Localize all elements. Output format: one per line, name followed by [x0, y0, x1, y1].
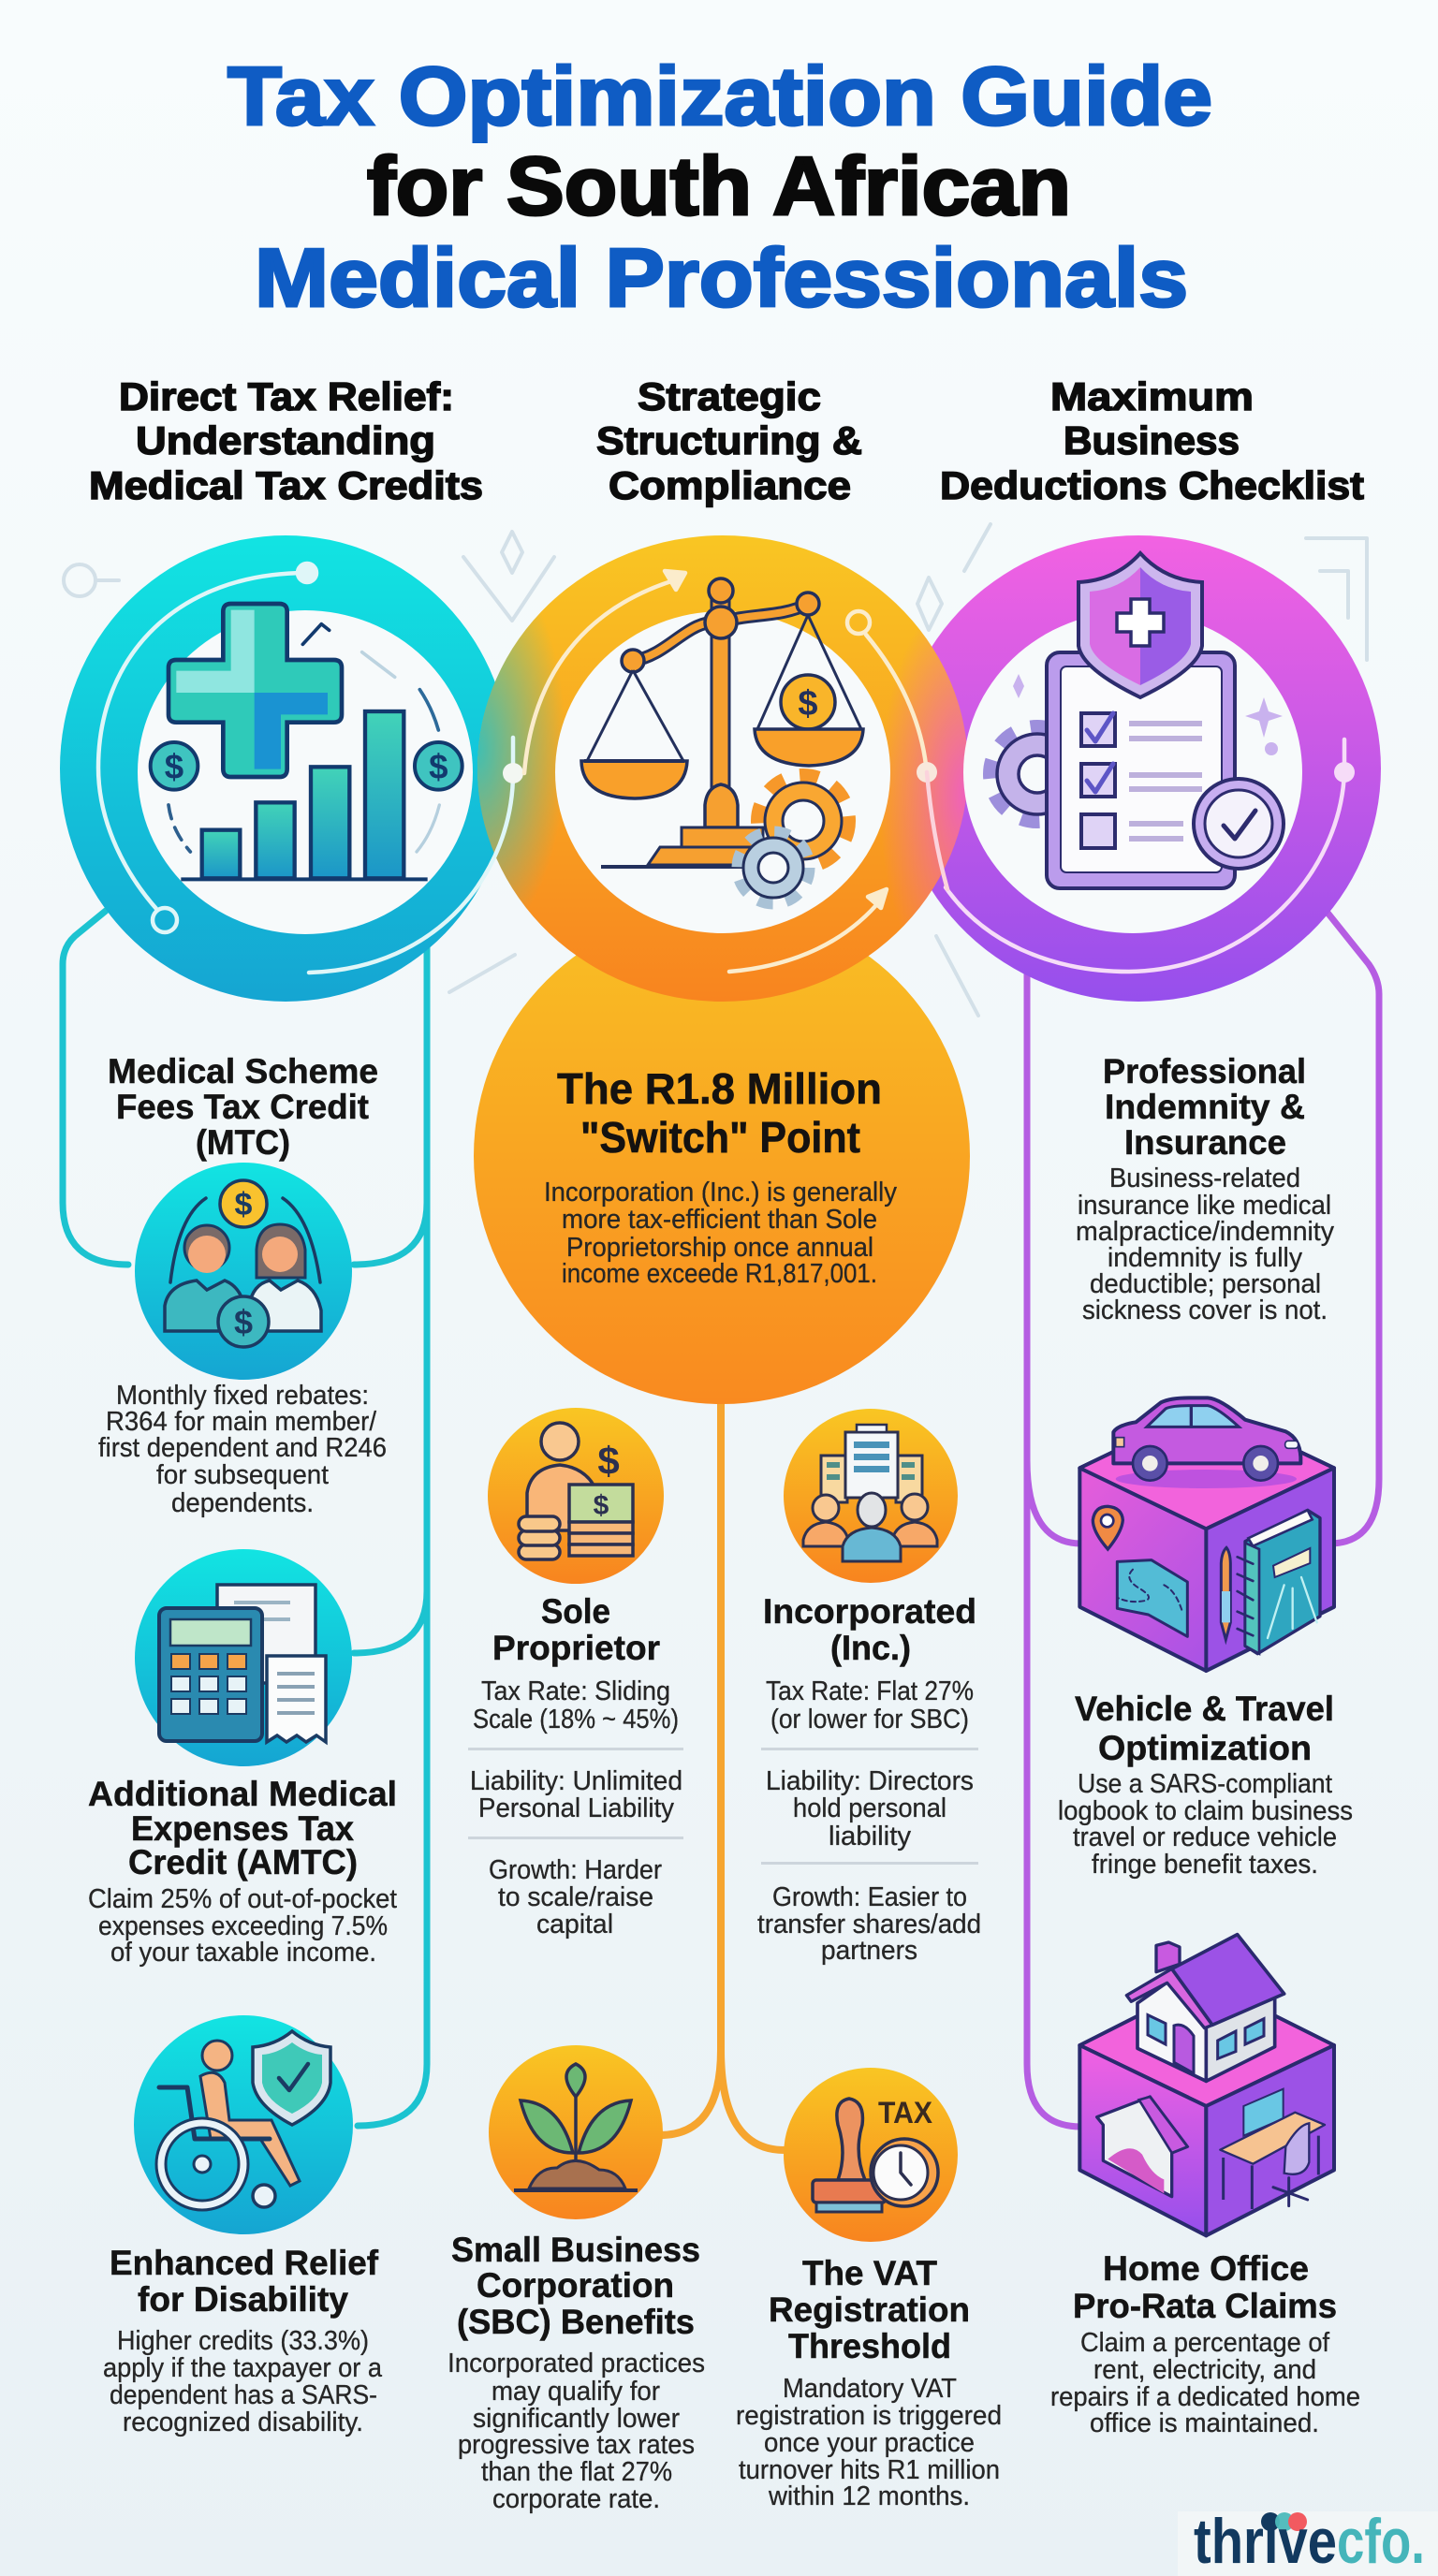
text block: professional indemnity and insurance: Professional — [1103, 1052, 1306, 1090]
text block: small business corporation: significantly lower — [473, 2404, 680, 2434]
text block: medical scheme fees tax credit — [98, 1052, 387, 1518]
text block: medical scheme fees tax credit: for subsequent — [156, 1460, 329, 1490]
text block: additional medical expenses tax credit: of your taxable income. — [110, 1938, 376, 1968]
icon: medical cross and bar chart: $ — [429, 748, 448, 786]
text block: small business corporation — [448, 2231, 705, 2514]
text block: vehicle and travel optimization: logbook to claim business — [1058, 1796, 1353, 1826]
text block: incorporated comparison: (or lower for SBC) — [770, 1705, 969, 1734]
heading: direct tax relief — [89, 374, 483, 507]
text block: enhanced relief for disability: recognized disability. — [123, 2408, 363, 2437]
text block: enhanced relief for disability: dependent has a SARS- — [110, 2380, 377, 2410]
logo: thrivecfo: thrive — [1194, 2506, 1337, 2576]
title: Medical Professionals — [255, 231, 1188, 324]
icon: checklist with shield and gear — [990, 553, 1284, 888]
logo: thrivecfo — [1178, 2506, 1438, 2576]
icon: house on cube with desk — [1079, 1935, 1334, 2235]
text block: medical scheme fees tax credit: Fees Tax Credit — [116, 1088, 369, 1126]
callout: R1.8 million switch point: income exceede R1,817,001. — [562, 1259, 877, 1289]
text block: VAT registration threshold: within 12 months. — [768, 2481, 970, 2511]
icon: calculator and receipts — [135, 1549, 352, 1766]
text block: professional indemnity and insurance: indemnity is fully — [1108, 1243, 1302, 1273]
text block: sole proprietor comparison: to scale/raise — [498, 1882, 653, 1912]
text block: sole proprietor comparison — [468, 1592, 683, 1939]
text block: sole proprietor comparison: Tax Rate: Sliding — [481, 1676, 670, 1706]
text block: vehicle and travel optimization — [1058, 1690, 1353, 1880]
icon: medical scheme members — [135, 1163, 352, 1380]
text block: home office pro-rata claims: Pro-Rata Claims — [1073, 2287, 1337, 2325]
text block: VAT registration threshold: Threshold — [788, 2327, 951, 2365]
background decorative marks — [64, 524, 1367, 1016]
icon: scales of justice with gears: $ — [798, 684, 818, 724]
text block: additional medical expenses tax credit: Additional Medical — [88, 1775, 397, 1813]
text block: medical scheme fees tax credit: (MTC) — [196, 1123, 290, 1162]
text block: professional indemnity and insurance: Indemnity & — [1105, 1088, 1305, 1126]
heading: strategic structuring: Compliance — [609, 463, 851, 507]
text block: VAT registration threshold: turnover hits R1 million — [739, 2455, 1000, 2485]
text block: incorporated comparison: transfer shares/add — [757, 1910, 981, 1939]
icon: incorporated buildings and partners — [784, 1409, 958, 1583]
icon: medical scheme members: $ — [235, 1187, 253, 1222]
text block: sole proprietor comparison: Liability: Unlimited — [470, 1766, 682, 1796]
text block: sole proprietor comparison: Proprietor — [492, 1629, 660, 1667]
text block: medical scheme fees tax credit: dependents. — [171, 1488, 314, 1518]
text block: sole proprietor comparison: Scale (18% ~ 45%) — [473, 1705, 679, 1734]
icon: car on cube with logbook and map — [1079, 1398, 1334, 1671]
text block: VAT registration threshold: registration is triggered — [736, 2401, 1002, 2431]
text block: sole proprietor comparison: Sole — [541, 1592, 610, 1631]
text block: incorporated comparison: Incorporated — [763, 1592, 976, 1631]
text block: enhanced relief for disability: Enhanced Relief — [110, 2244, 379, 2282]
text block: small business corporation: than the flat 27% — [481, 2457, 672, 2487]
icon: seedling — [489, 2045, 663, 2219]
text block: home office pro-rata claims: rent, electricity, and — [1093, 2355, 1316, 2385]
callout: R1.8 million switch point: "Switch" Point — [580, 1113, 860, 1162]
icon: medical cross and bar chart — [151, 604, 462, 879]
callout: R1.8 million switch point: Proprietorship once annual — [566, 1233, 873, 1263]
text block: VAT registration threshold: Registration — [769, 2291, 970, 2329]
heading: maximum business deductions: Business — [1064, 418, 1240, 462]
title — [227, 50, 1212, 324]
text block: incorporated comparison — [757, 1592, 981, 1966]
text block: enhanced relief for disability — [103, 2244, 383, 2437]
callout: R1.8 million switch point — [544, 1064, 897, 1289]
text block: professional indemnity and insurance: insurance like medical — [1078, 1191, 1331, 1221]
text block: vehicle and travel optimization: travel or reduce vehicle — [1073, 1822, 1337, 1852]
text block: incorporated comparison: (Inc.) — [830, 1629, 911, 1667]
icon: medical cross and bar chart: $ — [165, 748, 183, 786]
text block: professional indemnity and insurance: Insurance — [1124, 1123, 1286, 1162]
icon: tax stamp and clock: TAX — [878, 2096, 933, 2130]
heading: direct tax relief: Medical Tax Credits — [89, 463, 483, 507]
icon: scales of justice with gears — [581, 578, 863, 903]
icon: tax stamp and clock — [784, 2068, 958, 2242]
text block: medical scheme fees tax credit: Monthly fixed rebates: — [116, 1381, 369, 1411]
text block: enhanced relief for disability: for Disability — [138, 2280, 348, 2319]
icon: sole proprietor with cash: $ — [594, 1490, 609, 1521]
text block: small business corporation: (SBC) Benefits — [457, 2303, 695, 2341]
text block: professional indemnity and insurance: Business-related — [1109, 1164, 1300, 1193]
text block: sole proprietor comparison: Growth: Harder — [489, 1855, 662, 1885]
callout: R1.8 million switch point: Incorporation (Inc.) is generally — [544, 1178, 897, 1208]
text block: vehicle and travel optimization: Use a SARS-compliant — [1078, 1769, 1332, 1799]
panel: three interlocking rings — [60, 534, 1381, 1404]
text block: medical scheme fees tax credit: R364 for main member/ — [106, 1407, 377, 1437]
icon: wheelchair and shield — [134, 2015, 353, 2234]
callout: R1.8 million switch point: The R1.8 Million — [557, 1064, 882, 1113]
text block: incorporated comparison: Growth: Easier to — [772, 1882, 967, 1912]
text block: home office pro-rata claims: office is maintained. — [1090, 2408, 1319, 2438]
text block: incorporated comparison: liability — [829, 1822, 912, 1852]
text block: additional medical expenses tax credit: Credit (AMTC) — [128, 1843, 358, 1881]
text block: medical scheme fees tax credit: first dependent and R246 — [98, 1433, 387, 1463]
text block: incorporated comparison: Tax Rate: Flat 27% — [766, 1676, 974, 1706]
text block: small business corporation: corporate rate. — [492, 2484, 660, 2514]
text block: additional medical expenses tax credit: expenses exceeding 7.5% — [98, 1911, 388, 1941]
heading: maximum business deductions: Deductions Checklist — [940, 463, 1364, 507]
text block: small business corporation: progressive tax rates — [458, 2430, 695, 2460]
text block: incorporated comparison: partners — [821, 1936, 917, 1966]
text block: additional medical expenses tax credit: Claim 25% of out-of-pocket — [88, 1884, 397, 1914]
text block: medical scheme fees tax credit: Medical Scheme — [108, 1052, 378, 1090]
text block: enhanced relief for disability: Higher credits (33.3%) — [117, 2326, 369, 2356]
text block: vehicle and travel optimization: Vehicle & Travel — [1075, 1690, 1334, 1728]
text block: home office pro-rata claims: repairs if a dedicated home — [1050, 2382, 1360, 2412]
callout: R1.8 million switch point: more tax-efficient than Sole — [562, 1205, 877, 1235]
text block: professional indemnity and insurance: sickness cover is not. — [1082, 1295, 1328, 1325]
text block: additional medical expenses tax credit: Expenses Tax — [131, 1809, 354, 1848]
heading: maximum business deductions: Maximum — [1050, 374, 1254, 418]
text block: vehicle and travel optimization: Optimization — [1098, 1729, 1312, 1767]
text block: incorporated comparison: hold personal — [793, 1793, 946, 1823]
orange connector lines — [660, 1399, 785, 2150]
text block: enhanced relief for disability: apply if the taxpayer or a — [103, 2353, 383, 2383]
text block: small business corporation: Corporation — [477, 2266, 674, 2305]
text block: professional indemnity and insurance — [1076, 1052, 1334, 1325]
text block: sole proprietor comparison: Personal Liability — [478, 1793, 674, 1823]
text block: small business corporation: may qualify for — [492, 2377, 660, 2407]
text block: sole proprietor comparison: capital — [536, 1910, 613, 1939]
heading: strategic structuring: Structuring & — [596, 418, 862, 462]
text block: professional indemnity and insurance: malpractice/indemnity — [1076, 1217, 1334, 1247]
text block: VAT registration threshold: once your practice — [764, 2428, 975, 2458]
ring arcs and nodes — [98, 564, 1355, 973]
teal connector lines — [63, 911, 427, 2126]
heading: direct tax relief: Understanding — [136, 418, 435, 462]
text block: small business corporation: Incorporated practices — [448, 2349, 705, 2378]
text block: VAT registration threshold: Mandatory VAT — [783, 2374, 957, 2404]
text block: VAT registration threshold — [736, 2254, 1002, 2511]
text block: additional medical expenses tax credit — [88, 1775, 397, 1968]
heading: strategic structuring — [596, 374, 862, 507]
text block: small business corporation: Small Business — [451, 2231, 700, 2269]
title: Tax Optimization Guide — [227, 50, 1212, 142]
text block: home office pro-rata claims — [1050, 2249, 1360, 2438]
text block: incorporated comparison: Liability: Directors — [766, 1766, 974, 1796]
text block: home office pro-rata claims: Claim a percentage of — [1080, 2328, 1330, 2358]
icon: medical scheme members: $ — [234, 1303, 253, 1341]
text block: vehicle and travel optimization: fringe benefit taxes. — [1092, 1850, 1318, 1880]
icon: sole proprietor with cash — [488, 1408, 664, 1584]
heading: maximum business deductions — [940, 374, 1364, 507]
text block: VAT registration threshold: The VAT — [802, 2254, 937, 2292]
text block: professional indemnity and insurance: deductible; personal — [1090, 1269, 1321, 1299]
heading: direct tax relief: Direct Tax Relief: — [119, 374, 454, 418]
text block: home office pro-rata claims: Home Office — [1103, 2249, 1309, 2288]
purple connector lines — [1027, 903, 1379, 2127]
heading: strategic structuring: Strategic — [638, 374, 821, 418]
title: for South African — [367, 139, 1071, 232]
icon: sole proprietor with cash: $ — [597, 1439, 620, 1483]
